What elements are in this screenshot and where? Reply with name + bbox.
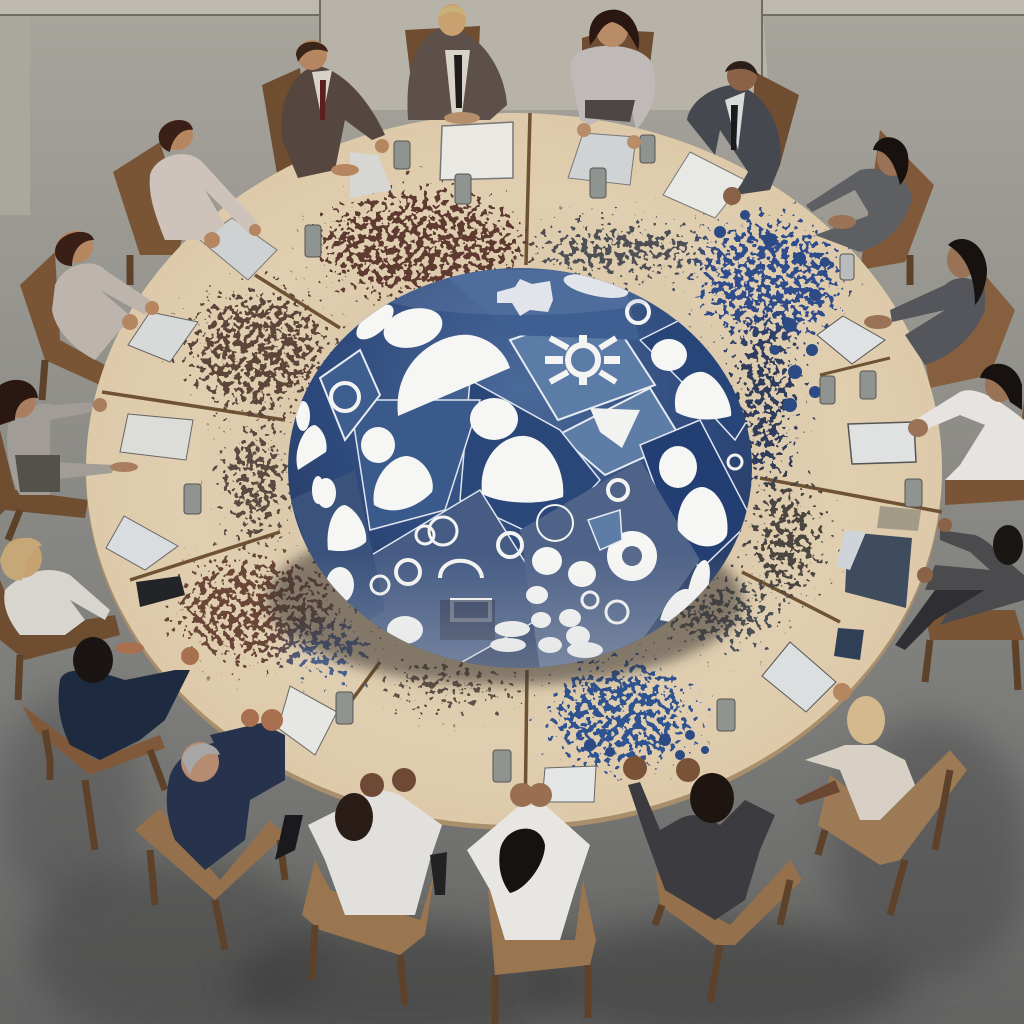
person: bottom right dark (623, 756, 775, 920)
person: upper left woman (150, 120, 261, 248)
person: bottom left white (308, 768, 447, 915)
person: left woman 2 (52, 231, 159, 360)
white symbol icons (331, 301, 742, 623)
particle clouds (173, 190, 842, 770)
person: lower right blonde (795, 683, 915, 820)
person: lower left grey-haired (167, 709, 303, 870)
table (86, 113, 942, 830)
large blue particles (584, 210, 830, 760)
person: right dark (895, 518, 1024, 650)
person: left blonde (0, 538, 110, 635)
white person icons (296, 269, 731, 658)
globe (280, 260, 760, 680)
person: lower left navy (59, 637, 199, 760)
person: upper left 1 (281, 40, 389, 178)
person: top centre (407, 4, 507, 124)
person: upper right woman (806, 137, 912, 252)
person: top right woman (571, 10, 655, 149)
table items: papers, cups, phones (106, 122, 922, 802)
person: bottom centre woman (467, 783, 590, 940)
person: right woman 2 (864, 239, 987, 365)
globe panels (290, 270, 760, 680)
person: left woman 3 (0, 380, 138, 495)
globe shadow (267, 515, 743, 685)
person: right woman 3 (908, 364, 1024, 480)
person: top right man (687, 61, 781, 205)
